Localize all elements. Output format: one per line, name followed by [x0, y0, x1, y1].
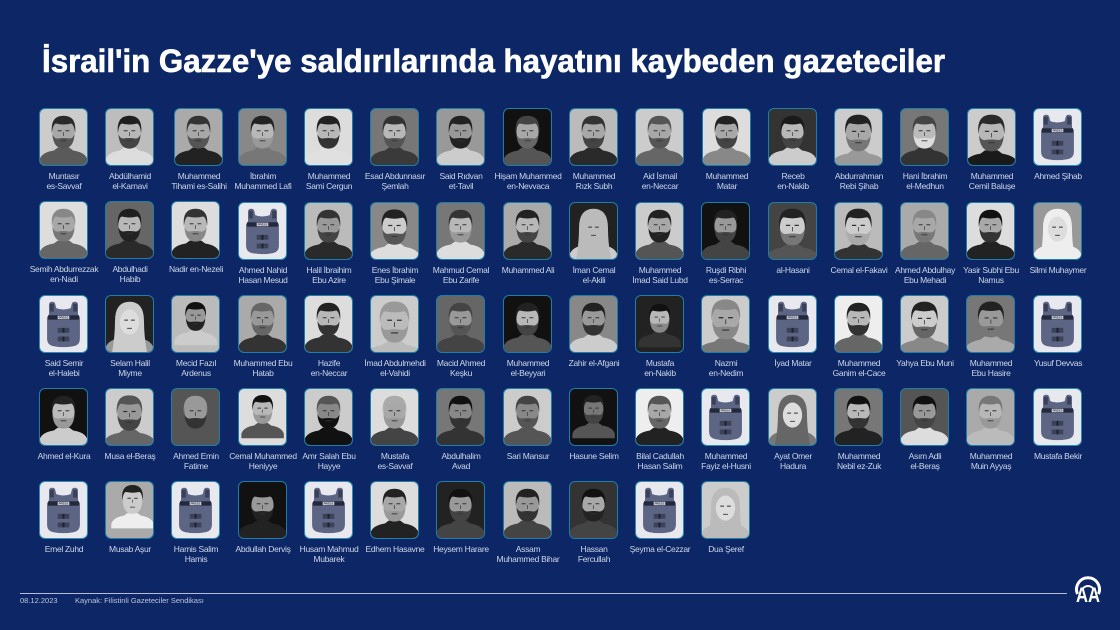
footer rule [20, 592, 1067, 594]
card: Ayat Omer Hadura: Hadura [780, 461, 806, 471]
card: Muntasır es-Savvaf: es-Savvaf [46, 181, 82, 191]
card: Ahmed Abdulhay Ebu Mehadi [895, 202, 956, 285]
card: al-Hasani: al-Hasani [776, 265, 810, 275]
card: Abdulhadi Habib: Abdulhadi [112, 264, 148, 274]
card: Zahir el-Afgani [561, 295, 627, 377]
card: Muhammed Sami Cergun [304, 108, 353, 191]
card: Assam Muhammed Bihar: Assam [516, 544, 540, 554]
card: Silmi Muhaymer: Silmi Muhaymer [1030, 265, 1086, 275]
card: Ahmed Şihab [1033, 108, 1082, 181]
card: Mustafa en-Nakib [627, 295, 693, 377]
card: Mahmud Cemal Ebu Zarife: Ebu Zarife [443, 275, 479, 285]
card: Aid İsmail en-Neccar: en-Neccar [642, 181, 678, 191]
icon: AA logo [1072, 572, 1106, 604]
card: Halil İbraihim Ebu Azire: Halil İbraihim [307, 265, 351, 275]
card: Silmi Muhaymer [1030, 202, 1087, 275]
card: Muhammed Ganim el-Cace: Ganim el-Cace [833, 368, 885, 378]
card: Ahmed Nahid Hasan Mesud: Hasan Mesud [238, 275, 288, 285]
card: Muhammed Cemil Baluşe [967, 108, 1016, 191]
card: Receb en-Nakib: Receb [781, 171, 805, 181]
card: Muhammed Ebu Hatab: Hatab [252, 368, 274, 378]
card: Şeyma el-Cezzar [627, 481, 693, 563]
card: Asım Adli el-Beraş [892, 388, 958, 470]
card: Muhammed Rızk Subh: Rızk Subh [576, 181, 612, 191]
card: Heysem Harare: Heysem Harare [433, 544, 489, 554]
card: Hazife en-Neccar: Hazife [318, 358, 340, 368]
card: Hassan Fercullah: Hassan [580, 544, 608, 554]
card: Muhammed Muin Ayyaş: Muhammed [970, 451, 1012, 461]
card: Amr Salah Ebu Hayye [296, 388, 362, 470]
card: Muhammed Fayiz el-Husni [693, 388, 759, 470]
card: Said Semir el-Halebi: el-Halebi [49, 368, 79, 378]
card: Abdulhadi Habib: Habib [120, 274, 140, 284]
card: Muhammed İmad Said Lubd: Muhammed [639, 265, 681, 275]
card: Asım Adli el-Beraş: el-Beraş [910, 461, 940, 471]
card: Hazife en-Neccar [304, 295, 353, 378]
card: Husam Mahmud Mubarek [296, 481, 362, 563]
card: Edhem Hasavne: Edhem Hasavne [366, 544, 424, 554]
card: Muhammed Sami Cergun: Muhammed [308, 171, 350, 181]
card: Mustafa Bekir [1025, 388, 1091, 470]
card: Nazmi en-Nedim: Nazmi [715, 358, 737, 368]
card: Cemal el-Fakavi [830, 202, 888, 275]
card: Hani İbrahim el-Medhun: el-Medhun [906, 181, 944, 191]
card: Semih Abdurrezzak en-Nadi: Semih Abdurrezzak [30, 264, 98, 274]
card: Ahmed Abdulhay Ebu Mehadi: Ebu Mehadi [904, 275, 946, 285]
card: Emel Zuhd: Emel Zuhd [45, 544, 83, 554]
card: Heysem Harare [428, 481, 494, 563]
card: Hassan Fercullah [561, 481, 627, 563]
card: Mecid Fazıl Ardenus [171, 295, 220, 378]
card: Halil İbraihim Ebu Azire [304, 202, 353, 285]
card: Hamis Salim Hamis: Hamis Salim [174, 544, 218, 554]
card: Mustafa es-Savvaf: Mustafa [381, 451, 409, 461]
card: Mustafa en-Nakib: Mustafa [646, 358, 674, 368]
card: Semih Abdurrezzak en-Nadi: en-Nadi [50, 274, 78, 284]
card: Emel Zuhd [31, 481, 97, 563]
card: Asım Adli el-Beraş: Asım Adli [909, 451, 941, 461]
card: Hişam Muhammed en-Nevvaca [494, 108, 562, 191]
card: Muhammed Fayiz el-Husni: Fayiz el-Husni [701, 461, 751, 471]
card: Selam Halil Miyme: Miyme [118, 368, 142, 378]
card: Abdülhamid el-Karnavi: el-Karnavi [112, 181, 148, 191]
card: Yusuf Devvas [1025, 295, 1091, 377]
card: Ahmed Nahid Hasan Mesud [238, 202, 288, 285]
card: Muhammed İmad Said Lubd [632, 202, 688, 285]
card: Selam Halil Miyme [105, 295, 154, 378]
card: Esad Abdunnasır Şemlah [365, 108, 426, 191]
card: Mecid Fazıl Ardenus: Ardenus [181, 368, 211, 378]
card: Said Semir el-Halebi [39, 295, 88, 378]
card: Muhammed el-Beyyari [495, 295, 561, 377]
card: Hasune Selim [561, 388, 627, 470]
card: Husam Mahmud Mubarek: Mubarek [314, 554, 344, 564]
card: Nazmi en-Nedim: en-Nedim [709, 368, 743, 378]
card: Hazife en-Neccar: en-Neccar [311, 368, 347, 378]
card: Enes İbrahim Ebu Şimale: Enes İbrahim [372, 265, 418, 275]
card: Muhammed Tihami es-Salihi: Tihami es-Salihi [171, 181, 227, 191]
card: Mustafa Bekir: Mustafa Bekir [1034, 451, 1082, 461]
card: Selam Halil Miyme: Selam Halil [110, 358, 150, 368]
card: Ruşdi Ribhi es-Serrac: es-Serrac [709, 275, 743, 285]
card: Enes İbrahim Ebu Şimale: Ebu Şimale [375, 275, 415, 285]
card: Muhammed Nebil ez-Zuk: Muhammed [838, 451, 880, 461]
card: Abdulhalim Avad [428, 388, 494, 470]
card: Said Semir el-Halebi: Said Semir [45, 358, 83, 368]
card: Abdurrahman Rebi Şihab [834, 108, 883, 191]
card: Zahir el-Afgani: Zahir el-Afgani [569, 358, 619, 368]
card: Nazmi en-Nedim [693, 295, 759, 377]
card: Amr Salah Ebu Hayye: Hayye [318, 461, 340, 471]
card: Macid Ahmed Keşku: Keşku [450, 368, 472, 378]
card: Said Rıdvan et-Tavil: et-Tavil [449, 181, 473, 191]
card: Muhammed el-Beyyari: Muhammed [507, 358, 549, 368]
card: Muhammed Fayiz el-Husni: Muhammed [705, 451, 747, 461]
card: Bilal Cadullah Hasan Salim: Hasan Salim [638, 461, 682, 471]
card: Ruşdi Ribhi es-Serrac [701, 202, 750, 285]
card: Semih Abdurrezzak en-Nadi [30, 201, 99, 284]
card: Assam Muhammed Bihar: Muhammed Bihar [497, 554, 559, 564]
card: Esad Abdunnasır Şemlah: Şemlah [381, 181, 409, 191]
card: Muhammed el-Beyyari: el-Beyyari [511, 368, 545, 378]
card: Muhammed Ebu Hatab: Muhammed Ebu [234, 358, 292, 368]
card: Hani İbrahim el-Medhun [900, 108, 949, 191]
card: Hamis Salim Hamis [163, 481, 229, 563]
card: Muhammed Ali [502, 202, 554, 275]
card: İbrahim Muhammed Lafi: İbrahim [250, 171, 276, 181]
card: Macid Ahmed Keşku [428, 295, 494, 377]
card: İyad Matar [760, 295, 826, 377]
card: Ayat Omer Hadura: Ayat Omer [774, 451, 812, 461]
card: Cemal Muhammed Heniyye: Heniyye [249, 461, 277, 471]
card: Muhammed Cemil Baluşe: Muhammed [971, 171, 1013, 181]
card: Muhammed Tihami es-Salihi: Muhammed [178, 171, 220, 181]
card: İman Cemal el-Akili: İman Cemal [573, 265, 615, 275]
card: Muhammed Ebu Hasire: Ebu Hasire [971, 368, 1011, 378]
card: Abdulhalim Avad: Abdulhalim [441, 451, 481, 461]
card: Abdülhamid el-Karnavi: Abdülhamid [109, 171, 151, 181]
card: Said Rıdvan et-Tavil: Said Rıdvan [439, 171, 482, 181]
card: Muhammed Cemil Baluşe: Cemil Baluşe [969, 181, 1015, 191]
card: Abdurrahman Rebi Şihab: Rebi Şihab [840, 181, 878, 191]
card: Abdurrahman Rebi Şihab: Abdurrahman [835, 171, 883, 181]
card: Cemal Muhammed Heniyye [230, 388, 296, 470]
card: Muhammed Ebu Hatab [234, 295, 292, 378]
card: Cemal Muhammed Heniyye: Cemal Muhammed [229, 451, 297, 461]
card: Hişam Muhammed en-Nevvaca: Hişam Muhammed [494, 171, 562, 181]
card: Ahmed Emin Fatime: Fatime [184, 461, 208, 471]
card: Muhammed Rızk Subh: Muhammed [573, 171, 615, 181]
card: Hani İbrahim el-Medhun: Hani İbrahim [903, 171, 947, 181]
card: Musa el-Beraş [97, 388, 163, 470]
card: Muhammed Nebil ez-Zuk [826, 388, 892, 470]
card: Muhammed Ali: Muhammed Ali [502, 265, 554, 275]
card: Muhammed Ganim el-Cace [826, 295, 892, 377]
card: Husam Mahmud Mubarek: Husam Mahmud [300, 544, 358, 554]
card: Muhammed İmad Said Lubd: İmad Said Lubd [632, 275, 688, 285]
card: İmad Abdulmehdi el-Vahidi: el-Vahidi [380, 368, 410, 378]
card: Nadir en-Nezeli: Nadir en-Nezeli [169, 264, 223, 274]
card: Muntasır es-Savvaf: Muntasır [49, 171, 79, 181]
card: İmad Abdulmehdi el-Vahidi: İmad Abdulmehdi [364, 358, 426, 368]
card: Ruşdi Ribhi es-Serrac: Ruşdi Ribhi [706, 265, 746, 275]
source: Kaynak: Filistinli Gazeteciler Sendikası [75, 596, 204, 605]
card: Mustafa en-Nakib: en-Nakib [644, 368, 676, 378]
card: Ahmed el-Kura: Ahmed el-Kura [38, 451, 90, 461]
card: Dua Şeref: Dua Şeref [708, 544, 744, 554]
card: Muhammed Ganim el-Cace: Muhammed [838, 358, 880, 368]
card: Bilal Cadullah Hasan Salim: Bilal Cadullah [636, 451, 684, 461]
card: Dua Şeref [693, 481, 759, 563]
card: Muhammed Matar: Muhammed [706, 171, 748, 181]
card: Halil İbraihim Ebu Azire: Ebu Azire [312, 275, 346, 285]
card: Nadir en-Nezeli [169, 201, 223, 274]
card: Mahmud Cemal Ebu Zarife: Mahmud Cemal [433, 265, 489, 275]
title: İsrail'in Gazze'ye saldırılarında hayatını kaybeden gazeteciler [42, 43, 945, 79]
card: Muhammed Tihami es-Salihi [171, 108, 227, 191]
card: Abdulhalim Avad: Avad [452, 461, 470, 471]
card: Musab Aşur [97, 481, 163, 563]
card: Muhammed Muin Ayyaş: Muin Ayyaş [971, 461, 1011, 471]
card: Yusuf Devvas: Yusuf Devvas [1034, 358, 1082, 368]
card: Amr Salah Ebu Hayye: Amr Salah Ebu [302, 451, 356, 461]
card: Ayat Omer Hadura [760, 388, 826, 470]
card: Muhammed Nebil ez-Zuk: Nebil ez-Zuk [837, 461, 881, 471]
card: Hassan Fercullah: Fercullah [578, 554, 610, 564]
card: Aid İsmail en-Neccar [635, 108, 684, 191]
card: Yahya Ebu Muni [892, 295, 958, 377]
card: Ahmed Emin Fatime: Ahmed Emin [173, 451, 219, 461]
card: Yasir Subhi Ebu Namus [963, 202, 1019, 285]
card: Said Rıdvan et-Tavil [436, 108, 485, 191]
card: Yasir Subhi Ebu Namus: Yasir Subhi Ebu [963, 265, 1019, 275]
card: Mustafa es-Savvaf [362, 388, 428, 470]
card: Mecid Fazıl Ardenus: Mecid Fazıl [176, 358, 216, 368]
card: Aid İsmail en-Neccar: Aid İsmail [643, 171, 677, 181]
card: Hamis Salim Hamis: Hamis [185, 554, 207, 564]
card: Ahmed Nahid Hasan Mesud: Ahmed Nahid [239, 265, 287, 275]
card: Enes İbrahim Ebu Şimale [370, 202, 419, 285]
card: Muntasır es-Savvaf [39, 108, 88, 191]
card: Yahya Ebu Muni: Yahya Ebu Muni [896, 358, 954, 368]
card: Ahmed Şihab: Ahmed Şihab [1034, 171, 1082, 181]
card: Assam Muhammed Bihar [495, 481, 561, 563]
card: Mustafa es-Savvaf: es-Savvaf [377, 461, 413, 471]
card: Mahmud Cemal Ebu Zarife [433, 202, 489, 285]
date: 08.12.2023 [20, 596, 58, 605]
card: Yasir Subhi Ebu Namus: Namus [978, 275, 1004, 285]
card: Muhammed Ebu Hasire [958, 295, 1024, 377]
card: Receb en-Nakib: en-Nakib [777, 181, 809, 191]
card: Abdulhadi Habib [105, 201, 154, 284]
card: Muhammed Matar [702, 108, 751, 191]
card: İbrahim Muhammed Lafi [234, 108, 292, 191]
card: Muhammed Muin Ayyaş [958, 388, 1024, 470]
card: Macid Ahmed Keşku: Macid Ahmed [437, 358, 485, 368]
card: İmad Abdulmehdi el-Vahidi [364, 295, 426, 378]
card: Ahmed Abdulhay Ebu Mehadi: Ahmed Abdulhay [895, 265, 955, 275]
card: Muhammed Rızk Subh [569, 108, 618, 191]
card: İman Cemal el-Akili [569, 202, 618, 285]
card: Abdullah Derviş [230, 481, 296, 563]
card: Sari Mansur [495, 388, 561, 470]
card: Abdülhamid el-Karnavi [105, 108, 154, 191]
card: Şeyma el-Cezzar: Şeyma el-Cezzar [630, 544, 690, 554]
card: Muhammed Sami Cergun: Sami Cergun [306, 181, 352, 191]
card: Hişam Muhammed en-Nevvaca: en-Nevvaca [507, 181, 549, 191]
card: al-Hasani [768, 202, 817, 275]
card: Musa el-Beraş: Musa el-Beraş [105, 451, 155, 461]
card: İbrahim Muhammed Lafi: Muhammed Lafi [234, 181, 292, 191]
card: Bilal Cadullah Hasan Salim [627, 388, 693, 470]
card: Muhammed Ebu Hasire: Muhammed [970, 358, 1012, 368]
card: Abdullah Derviş: Abdullah Derviş [235, 544, 291, 554]
card: İman Cemal el-Akili: el-Akili [583, 275, 605, 285]
card: Muhammed Matar: Matar [717, 181, 737, 191]
card: Edhem Hasavne [362, 481, 428, 563]
card: Ahmed el-Kura [31, 388, 97, 470]
card: İyad Matar: İyad Matar [774, 358, 812, 368]
card: Cemal el-Fakavi: Cemal el-Fakavi [831, 265, 887, 275]
journalist grid [30, 108, 1087, 564]
card: Receb en-Nakib [768, 108, 817, 191]
card: Ahmed Emin Fatime [163, 388, 229, 470]
card: Sari Mansur: Sari Mansur [507, 451, 549, 461]
card: Hasune Selim: Hasune Selim [569, 451, 619, 461]
card: Musab Aşur: Musab Aşur [109, 544, 151, 554]
card: Esad Abdunnasır Şemlah: Esad Abdunnasır [365, 171, 425, 181]
